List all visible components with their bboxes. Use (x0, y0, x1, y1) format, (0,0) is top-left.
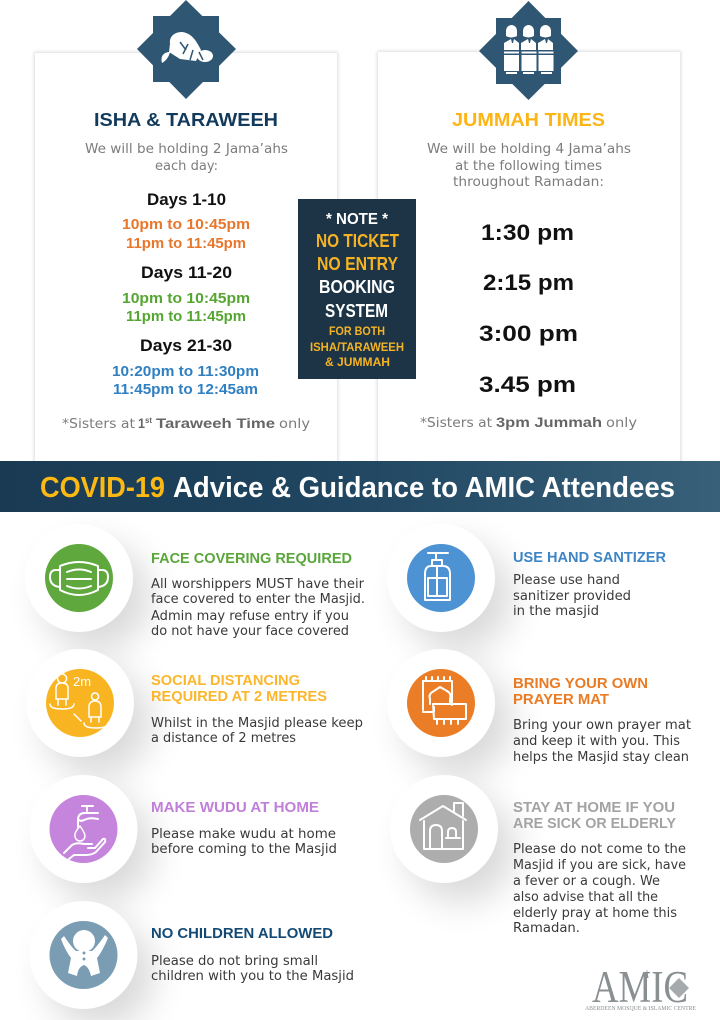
description (151, 577, 365, 639)
callout: no ticket no entry: SYSTEM (325, 301, 388, 321)
icon: tap and hand (50, 795, 118, 863)
description: helps the Masjid stay clean (513, 750, 689, 765)
callout: no ticket no entry: & JUMMAH (325, 355, 390, 369)
intro text (85, 142, 288, 174)
description (151, 954, 354, 984)
banner: COVID-19 advice heading: Advice & Guidance to AMIC Attendees (173, 472, 675, 504)
schedule: days 11-20: Days 11-20 (141, 264, 232, 282)
description: Whilst in the Masjid please keep (151, 716, 363, 731)
heading: NO CHILDREN ALLOWED (151, 926, 333, 942)
schedule: days 11-20 (122, 264, 250, 325)
panel: Isha and Taraweeh (34, 0, 338, 473)
schedule: days 21-30: Days 21-30 (140, 337, 232, 355)
panel: Jummah Times (377, 1, 681, 472)
icon: sanitizer bottle (407, 544, 475, 612)
intro text: throughout Ramadan: (453, 175, 604, 190)
callout: no ticket no entry: NO TICKET (316, 231, 399, 251)
schedule: days 21-30: 11:45pm to 12:45am (113, 381, 258, 398)
description (513, 842, 686, 936)
schedule: days 21-30 (112, 337, 259, 398)
Jummah time list (479, 220, 578, 397)
description: a fever or a cough. We (513, 874, 660, 889)
note: sisters at 3pm Jummah: *Sisters at (420, 416, 492, 431)
callout: no ticket no entry (298, 199, 416, 379)
heading: REQUIRED AT 2 METRES (151, 689, 327, 705)
description (513, 718, 691, 765)
heading: ARE SICK OR ELDERLY (513, 816, 676, 832)
icon: three worshippers star (479, 1, 578, 100)
schedule: days 11-20: 10pm to 10:45pm (122, 290, 250, 307)
description: also advise that all the (513, 890, 658, 905)
callout: no ticket no entry: * NOTE * (326, 211, 389, 228)
note: sisters at 3pm Jummah: only (606, 416, 637, 431)
heading: Isha and Taraweeh: ISHA & TARAWEEH (94, 109, 278, 130)
intro text: We will be holding 4 Jama’ahs (427, 142, 631, 157)
description (151, 827, 337, 857)
description (151, 716, 363, 746)
icon: prostrating worshipper star (137, 0, 236, 99)
item: face covering (25, 524, 365, 651)
intro text: each day: (155, 159, 218, 174)
description: face covered to enter the Masjid. (151, 592, 365, 607)
schedule: days 11-20: 11pm to 11:45pm (126, 308, 246, 325)
schedule: days 1-10: 11pm to 11:45pm (126, 235, 246, 252)
icon: face mask (45, 544, 113, 612)
schedule: days 1-10 (122, 191, 250, 252)
icon: house (410, 795, 478, 863)
heading: MAKE WUDU AT HOME (151, 800, 319, 816)
intro text: We will be holding 2 Jama’ahs (85, 142, 288, 157)
schedule: days 1-10: Days 1-10 (147, 191, 226, 209)
description: Please use hand (513, 573, 620, 588)
note: sisters at first Taraweeh: *Sisters at (62, 417, 135, 432)
callout: no ticket no entry: ISHA/TARAWEEH (310, 340, 404, 354)
heading: USE HAND SANTIZER (513, 550, 667, 566)
heading (513, 676, 648, 708)
note: sisters at first Taraweeh: only (279, 417, 310, 432)
Jummah time list: 3:00 pm (479, 321, 578, 346)
heading (513, 800, 676, 832)
heading: Jummah Times: JUMMAH TIMES (452, 109, 605, 130)
description: Ramadan. (513, 921, 580, 936)
note: sisters at first Taraweeh (62, 415, 310, 432)
item: prayer mat (387, 649, 691, 776)
note: sisters at 3pm Jummah (420, 414, 637, 431)
icon: baby (50, 921, 118, 989)
description: elderly pray at home this (513, 906, 677, 921)
intro text (427, 142, 631, 190)
description: Please do not come to the (513, 842, 686, 857)
description (513, 573, 631, 619)
callout: no ticket no entry: NO ENTRY (317, 254, 398, 274)
intro text: at the following times (455, 159, 602, 174)
icon: prayer mat (407, 669, 475, 737)
description: and keep it with you. This (513, 734, 680, 749)
note: sisters at first Taraweeh: 1 (138, 415, 145, 431)
note: sisters at first Taraweeh: Taraweeh Time (156, 415, 275, 431)
Jummah time list: 3.45 pm (479, 372, 576, 397)
Jummah time list: 1:30 pm (481, 220, 574, 245)
item: no children (30, 901, 354, 1020)
description: Masjid if you are sick, have (513, 858, 686, 873)
description: do not have your face covered (151, 624, 349, 639)
description: children with you to the Masjid (151, 969, 354, 984)
description: All worshippers MUST have their (151, 577, 365, 592)
icon: two people 2 metres apart (46, 669, 114, 737)
schedule: days 1-10: 10pm to 10:45pm (122, 216, 250, 233)
icon: two people 2 metres apart: 2m (73, 674, 91, 689)
callout: no ticket no entry: FOR BOTH (329, 324, 385, 338)
schedule: days 21-30: 10:20pm to 11:30pm (112, 363, 259, 380)
heading: STAY AT HOME IF YOU (513, 800, 675, 816)
logo: AMIC: AMIC (592, 962, 688, 1012)
Jummah time list: 2:15 pm (483, 270, 574, 295)
logo: AMIC: ABERDEEN MOSQUE & ISLAMIC CENTRE (585, 1005, 696, 1012)
item: wudu (30, 775, 337, 902)
item: hand sanitizer (387, 524, 667, 651)
note: sisters at 3pm Jummah: 3pm Jummah (496, 414, 602, 430)
description: before coming to the Masjid (151, 842, 337, 857)
description: Please make wudu at home (151, 827, 336, 842)
description: sanitizer provided (513, 589, 631, 604)
description: a distance of 2 metres (151, 731, 296, 746)
heading: BRING YOUR OWN (513, 676, 648, 692)
item: stay at home (390, 775, 686, 936)
item: social distancing (26, 649, 363, 776)
banner: COVID-19 advice heading: COVID-19 (40, 472, 165, 504)
description: Admin may refuse entry if you (151, 609, 349, 624)
description: Bring your own prayer mat (513, 718, 691, 733)
note: sisters at first Taraweeh: st (145, 416, 152, 425)
description: Please do not bring small (151, 954, 318, 969)
banner: COVID-19 advice heading (0, 461, 720, 512)
heading: PRAYER MAT (513, 692, 609, 708)
description: in the masjid (513, 604, 599, 619)
callout: no ticket no entry: BOOKING (319, 277, 395, 297)
heading: SOCIAL DISTANCING (151, 673, 300, 689)
heading (151, 673, 327, 705)
heading: FACE COVERING REQUIRED (151, 551, 352, 567)
